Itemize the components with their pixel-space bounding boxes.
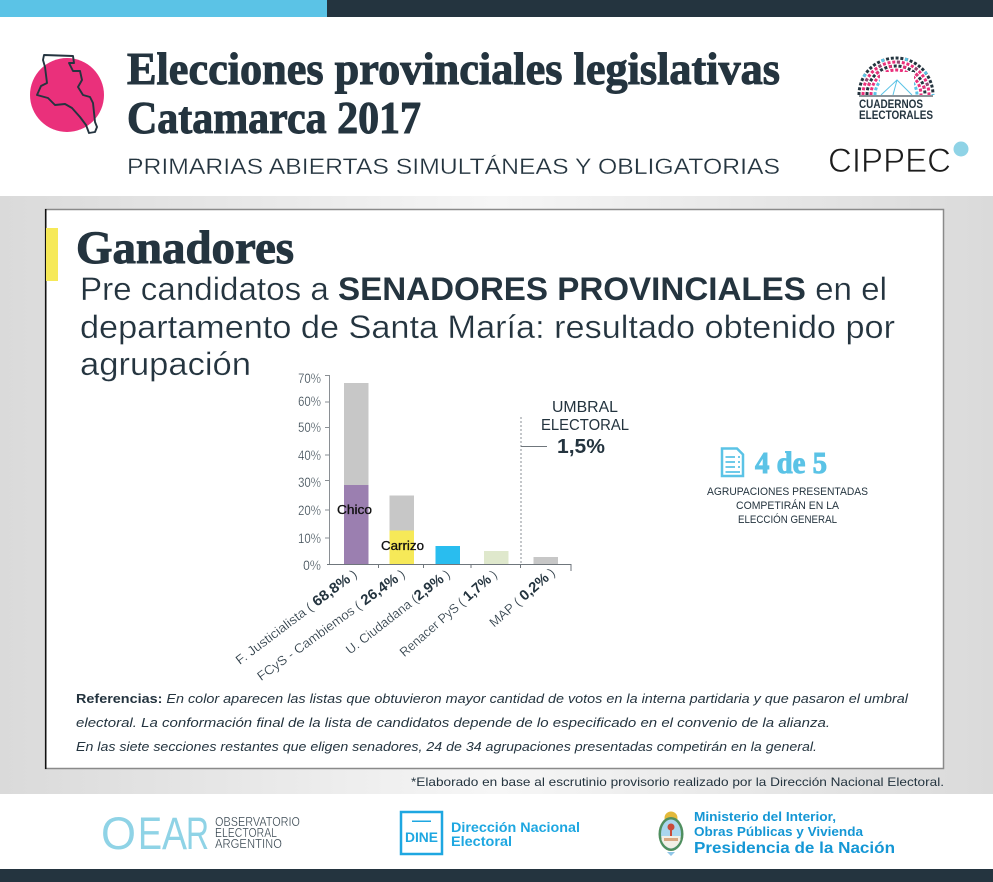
logo: Ministerio del Interior xyxy=(658,809,895,857)
callout: 4 de 5: 4 de 5 xyxy=(755,445,827,480)
logo: OEAR: ARGENTINO xyxy=(215,837,282,851)
y axis: 30% xyxy=(298,474,321,490)
callout: 4 de 5 xyxy=(707,445,868,526)
references: En las siete secciones restantes que eligen senadores, 24 de 34 agrupaciones presentadas competirán en la general. xyxy=(76,739,817,754)
logo: OEAR xyxy=(101,808,300,859)
logo: DINE xyxy=(401,812,580,854)
logo: OEAR: ELECTORAL xyxy=(215,826,277,840)
y axis: 70% xyxy=(298,370,321,386)
logo: CIPPEC: CIPPEC xyxy=(828,142,951,180)
y axis: 0% xyxy=(303,557,321,573)
chart title xyxy=(80,271,895,382)
logo: OEAR: A xyxy=(162,808,187,859)
x labels xyxy=(233,565,559,684)
bar: F. Justicialista xyxy=(337,383,372,564)
title: Elecciones provinciales legislativas xyxy=(127,44,780,94)
references xyxy=(76,691,909,754)
bar chart xyxy=(233,370,572,684)
bar: MAP xyxy=(534,557,558,564)
grey background band xyxy=(0,196,993,794)
title xyxy=(127,44,780,143)
logo: Ministerio del Interior: Obras Públicas y Vivienda xyxy=(694,824,864,839)
logo: Ministerio del Interior: Presidencia de la Nación xyxy=(694,840,895,857)
bar: FCyS - Cambiemos xyxy=(381,496,424,564)
x labels: FCyS - Cambiemos ( 26,4% ) xyxy=(254,566,408,684)
chart title: departamento de Santa María: resultado obtenido por xyxy=(80,309,895,345)
title: Catamarca 2017 xyxy=(127,93,421,143)
callout: 4 de 5: AGRUPACIONES PRESENTADAS xyxy=(707,486,868,498)
logo: OEAR: R xyxy=(186,808,209,859)
y axis: 20% xyxy=(298,502,321,518)
bottom bar xyxy=(0,869,993,882)
y axis: 60% xyxy=(298,393,321,409)
logo: Ministerio del Interior: Ministerio del Interior, xyxy=(694,809,836,824)
icon: document xyxy=(722,448,743,476)
source note: *Elaborado en base al escrutinio provisorio realizado por la Dirección Nacional Electoral. xyxy=(411,775,944,789)
logo: Cuadernos Electorales: ELECTORALES xyxy=(859,108,933,122)
threshold marker: UMBRAL xyxy=(552,399,618,416)
bar: F. Justicialista: Chico xyxy=(337,503,372,517)
bar: FCyS - Cambiemos: Carrizo xyxy=(381,539,424,553)
y axis: 40% xyxy=(298,447,321,463)
references: electoral. La conformación final de la lista de candidatos depende de lo especificado en el convenio de la alianza. xyxy=(76,715,830,730)
y axis: 10% xyxy=(298,530,321,546)
x labels: F. Justicialista ( 68,8% ) xyxy=(233,566,360,668)
threshold marker: 1,5% xyxy=(557,436,605,458)
threshold marker xyxy=(521,399,629,565)
y axis xyxy=(298,370,330,573)
logo: DINE: Dirección Nacional xyxy=(451,820,580,835)
logo: Cuadernos Electorales: CUADERNOS xyxy=(859,97,923,111)
footer white band xyxy=(0,794,993,868)
x labels: MAP ( 0,2% ) xyxy=(486,565,559,631)
yellow accent bar xyxy=(46,228,58,281)
icon: Catamarca map on pink circle xyxy=(30,55,104,133)
callout: 4 de 5: COMPETIRÁN EN LA xyxy=(736,499,840,512)
logo: OEAR: E xyxy=(138,808,162,859)
logo: DINE: Electoral xyxy=(451,834,512,849)
chart title: agrupación xyxy=(80,346,251,382)
panel: main content xyxy=(45,209,944,769)
x labels: Renacer PyS ( 1,7% ) xyxy=(397,567,501,660)
icon: coat of arms xyxy=(658,812,684,856)
callout: 4 de 5: ELECCIÓN GENERAL xyxy=(738,513,837,526)
logo: OEAR: OBSERVATORIO xyxy=(215,815,300,829)
references: Referencias: En color aparecen las listas que obtuvieron mayor cantidad de votos en la interna partidaria y que pasaron el umbral xyxy=(76,691,909,706)
threshold marker: ELECTORAL xyxy=(541,417,629,434)
chart title: Pre candidatos a SENADORES PROVINCIALES en el xyxy=(80,271,887,307)
top bar xyxy=(0,0,993,17)
logo: DINE: DINE xyxy=(405,830,438,845)
x labels: U. Ciudadana (2,9% ) xyxy=(343,567,453,658)
logo: OEAR: O xyxy=(101,808,136,859)
x axis xyxy=(327,564,572,571)
y axis: 50% xyxy=(298,419,321,435)
subtitle: PRIMARIAS ABIERTAS SIMULTÁNEAS Y OBLIGATORIAS xyxy=(127,154,780,179)
heading: Ganadores xyxy=(76,222,294,274)
bar: U. Ciudadana xyxy=(436,546,460,564)
logo: Cuadernos Electorales xyxy=(859,58,933,122)
bar: Renacer PyS xyxy=(484,551,508,564)
